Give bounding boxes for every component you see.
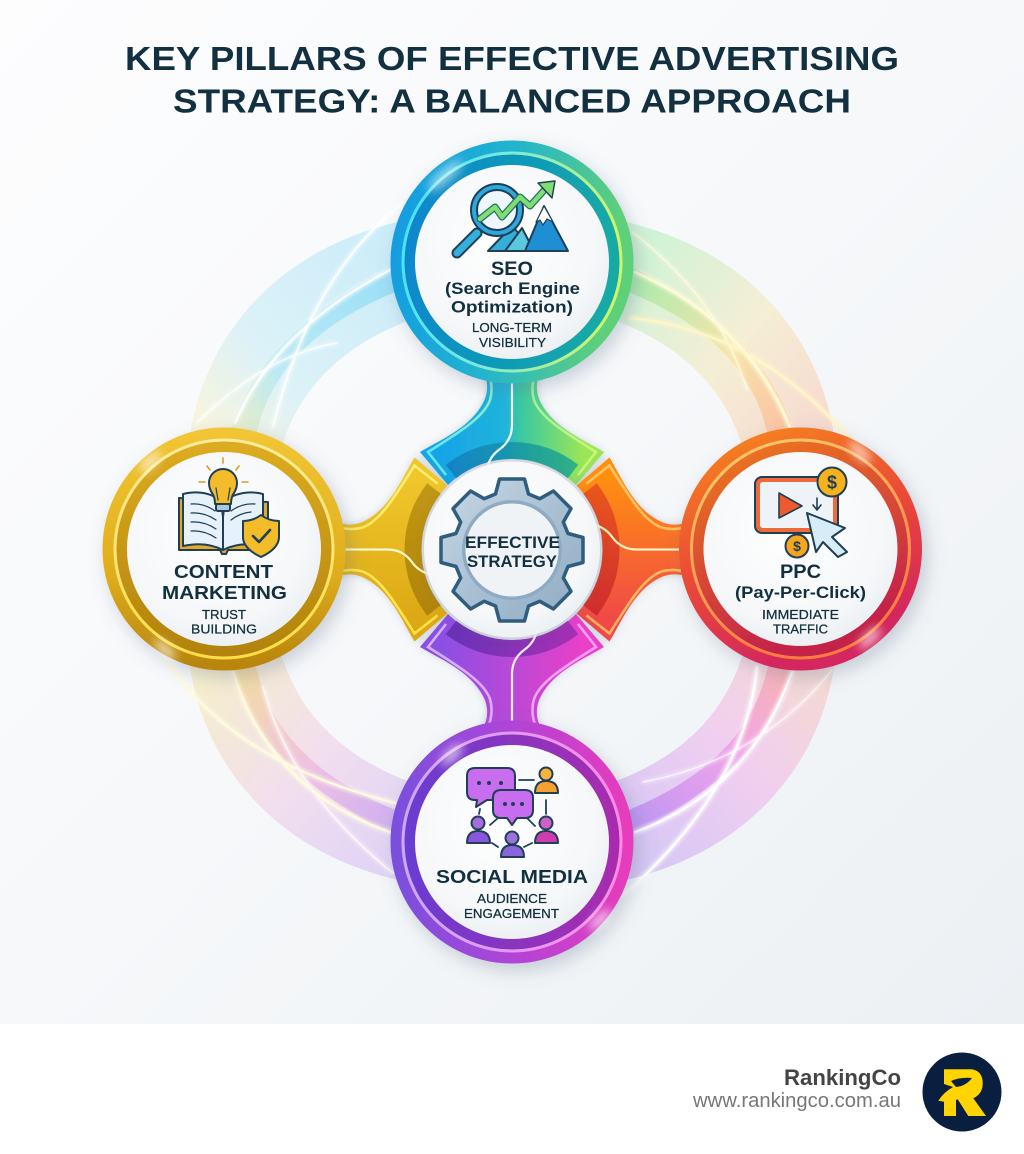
icon: magnifier, growth arrow and mountains <box>457 181 568 253</box>
label: PPC: IMMEDIATE <box>762 608 839 622</box>
title <box>125 40 899 120</box>
label: SEO: LONG-TERM <box>472 321 552 335</box>
icon: book, light bulb and shield <box>179 458 279 557</box>
icon: chat bubbles and connected people <box>467 768 558 857</box>
icon: gear <box>441 479 583 621</box>
ring: SEO <box>397 147 627 377</box>
node: Social Media <box>397 727 627 957</box>
label: PPC <box>735 562 866 636</box>
icon: video ad, coins and cursor: $ <box>827 472 837 492</box>
label: Content Marketing <box>162 561 287 636</box>
label: Content Marketing: CONTENT <box>174 561 274 582</box>
brand name: RankingCo <box>784 1065 901 1090</box>
label: Content Marketing: MARKETING <box>162 582 287 603</box>
node: PPC <box>686 434 916 664</box>
icon: video ad, coins and cursor <box>755 468 847 558</box>
arc band: PPC to Social Media <box>594 632 836 898</box>
connector: Social Media <box>420 614 604 736</box>
label: Effective Strategy: STRATEGY <box>467 552 558 571</box>
node: Content Marketing <box>109 434 339 664</box>
label: Social Media: ENGAGEMENT <box>464 907 559 921</box>
label: Social Media: AUDIENCE <box>477 892 547 906</box>
label: PPC: TRAFFIC <box>773 622 828 636</box>
footer <box>0 1024 1024 1154</box>
label: Effective Strategy <box>465 533 560 571</box>
ring: Content Marketing <box>109 434 339 664</box>
label: Social Media: SOCIAL MEDIA <box>436 866 588 887</box>
label: Content Marketing: BUILDING <box>191 622 257 636</box>
arc band: SEO to PPC <box>594 215 860 470</box>
arc band: SEO to Content <box>188 203 430 470</box>
label: SEO: SEO <box>491 258 533 280</box>
label: SEO: (Search Engine <box>445 279 580 298</box>
ring: Social Media <box>397 727 627 957</box>
icon: video ad, coins and cursor: $ <box>793 538 801 554</box>
sparkle highlights on rings <box>137 439 883 933</box>
label: Effective Strategy: EFFECTIVE <box>465 533 560 552</box>
connector: PPC <box>576 458 698 642</box>
ring: PPC <box>686 434 916 664</box>
arc band: Content to Social Media <box>163 632 430 887</box>
node: SEO <box>397 147 627 377</box>
label: Content Marketing: TRUST <box>202 607 246 622</box>
label: SEO: Optimization) <box>451 298 573 316</box>
title: STRATEGY: A BALANCED APPROACH <box>173 82 851 120</box>
label: PPC: (Pay-Per-Click) <box>735 583 866 602</box>
connector: Content Marketing <box>326 458 448 642</box>
brand url: www.rankingco.com.au <box>692 1090 901 1112</box>
label: SEO <box>445 258 580 350</box>
hub: Effective Strategy <box>424 462 600 638</box>
logo <box>922 1052 1002 1132</box>
label: PPC: PPC <box>780 562 821 583</box>
connector: SEO <box>420 363 604 485</box>
label: SEO: VISIBILITY <box>479 336 547 350</box>
title: KEY PILLARS OF EFFECTIVE ADVERTISING <box>125 40 899 77</box>
label: Social Media <box>436 866 588 921</box>
